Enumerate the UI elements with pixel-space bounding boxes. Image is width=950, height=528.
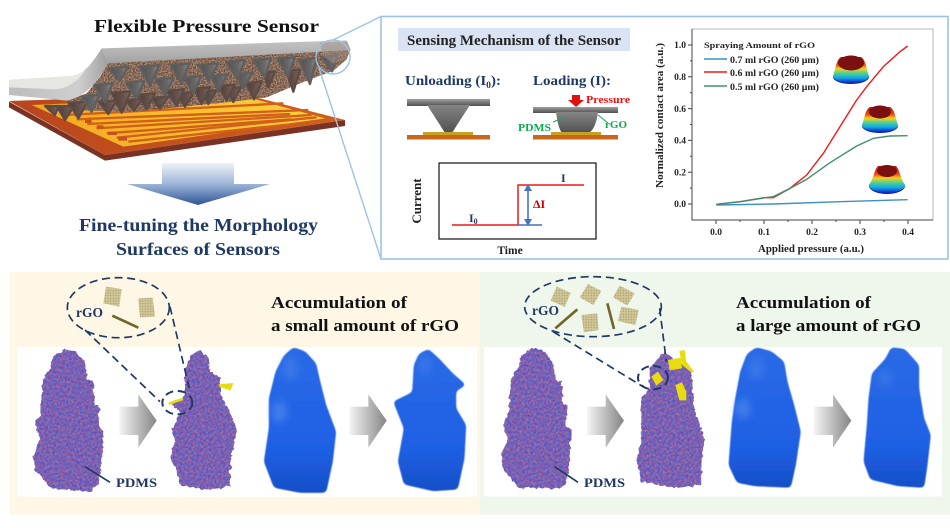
simulation graphics: small amount <box>33 278 466 493</box>
PDMS leader <box>555 467 578 482</box>
rGO sheets <box>103 287 155 328</box>
diagram: unloading state: 0 <box>486 80 492 90</box>
chart: normalized contact area: 0.1 <box>758 228 770 238</box>
process arrow 2 <box>814 394 851 448</box>
legend: Spraying Amount of rGO <box>704 40 815 50</box>
subtitle: fine-tuning the morphology <box>79 215 318 259</box>
chart: normalized contact area: 0.3 <box>854 228 866 238</box>
panel: small amount of rGO <box>10 272 480 514</box>
chart: normalized contact area: 0.2 <box>674 168 686 178</box>
chart: normalized contact area: 0.4 <box>902 228 914 238</box>
subtitle: fine-tuning the morphology: Fine-tuning the Morphology <box>79 215 318 235</box>
chart: normalized contact area: 0.4 <box>674 136 686 146</box>
chart: current vs time: I <box>561 171 566 185</box>
chart: current vs time: 0 <box>474 217 478 226</box>
diagram: unloading state: ): <box>491 74 501 89</box>
top film underside <box>67 50 350 112</box>
panel: large amount of rGO <box>480 272 950 514</box>
diagram: loading state: rGO <box>605 119 627 131</box>
diagram: unloading state: Unloading (I <box>405 74 481 89</box>
PDMS cluster after <box>170 350 237 490</box>
label: PDMS: PDMS <box>584 475 625 490</box>
curves <box>716 46 908 205</box>
simulation graphics: large amount <box>501 277 931 488</box>
legend <box>704 40 819 93</box>
panel: sensing mechanism and contact area <box>381 16 948 259</box>
diagram: unloading state <box>405 74 501 140</box>
chart: normalized contact area <box>654 29 933 255</box>
chart: current vs time: ΔI <box>533 197 546 211</box>
PDMS cluster after <box>636 352 704 488</box>
heading: small amount: a small amount of rGO <box>271 316 459 335</box>
chart: current vs time: Current <box>409 178 424 224</box>
diagram: loading state: PDMS <box>518 122 551 134</box>
chart: normalized contact area: 0.2 <box>806 228 818 238</box>
label: rGO: rGO <box>76 305 103 320</box>
subtitle: fine-tuning the morphology: Surfaces of Sensors <box>116 239 280 259</box>
microstructure cones <box>45 55 337 120</box>
legend: 0.6 ml rGO (260 μm) <box>730 68 819 79</box>
top film <box>9 40 351 101</box>
down arrow <box>127 163 270 205</box>
process arrow 1 <box>119 394 157 448</box>
dome insets <box>833 56 905 194</box>
blue surface after <box>864 347 931 488</box>
process arrow 1 <box>587 394 624 448</box>
chart: normalized contact area: Normalized contact area (a.u.) <box>654 43 666 188</box>
label: PDMS: PDMS <box>116 475 157 490</box>
heading: sensing mechanism <box>398 28 630 51</box>
chart: current vs time <box>409 163 596 257</box>
chart: normalized contact area: 0.0 <box>674 200 686 210</box>
heading: large amount <box>736 293 921 335</box>
heading: small amount <box>271 293 459 335</box>
rGO sheets <box>551 284 639 332</box>
legend: 0.5 ml rGO (260 μm) <box>730 82 819 93</box>
pressure arrow <box>568 95 584 107</box>
callout circle and leader lines <box>316 16 381 259</box>
diagram: loading state: Loading (I): <box>533 74 611 89</box>
chart: current vs time: Time <box>497 245 523 257</box>
chart: normalized contact area: 0.0 <box>710 228 722 238</box>
heading: small amount: Accumulation of <box>271 293 407 312</box>
PDMS cluster before <box>33 350 103 492</box>
chart: current vs time: I <box>469 211 474 225</box>
chart: normalized contact area: 0.8 <box>674 73 686 83</box>
blue surface before <box>729 347 801 488</box>
diagram: loading state: Pressure <box>586 94 630 106</box>
chart: normalized contact area: 0.6 <box>674 105 686 115</box>
process arrow 2 <box>349 394 387 448</box>
heading: sensing mechanism: Sensing Mechanism of the Sensor <box>407 33 622 49</box>
blue surface before <box>264 347 336 493</box>
illustration: flexible pressure sensor <box>9 40 351 161</box>
diagram: loading state <box>518 74 630 140</box>
yellow rGO on cluster <box>651 350 694 400</box>
yellow rGO on cluster <box>168 383 233 405</box>
legend: 0.7 ml rGO (260 μm) <box>730 55 819 66</box>
sensor board <box>9 93 345 161</box>
chart: normalized contact area: 1.0 <box>674 41 686 51</box>
title: flexible pressure sensor: Flexible Pressure Sensor <box>94 16 319 36</box>
heading: large amount: Accumulation of <box>736 293 871 312</box>
label: rGO: rGO <box>532 303 559 318</box>
chart: normalized contact area: Applied pressure (a.u.) <box>758 243 864 255</box>
PDMS leader <box>85 467 110 482</box>
rGO zoom callout <box>525 277 668 389</box>
blue surface after <box>393 349 466 491</box>
heading: large amount: a large amount of rGO <box>736 316 921 335</box>
PDMS cluster before <box>501 348 571 488</box>
rGO zoom callout <box>67 278 192 414</box>
